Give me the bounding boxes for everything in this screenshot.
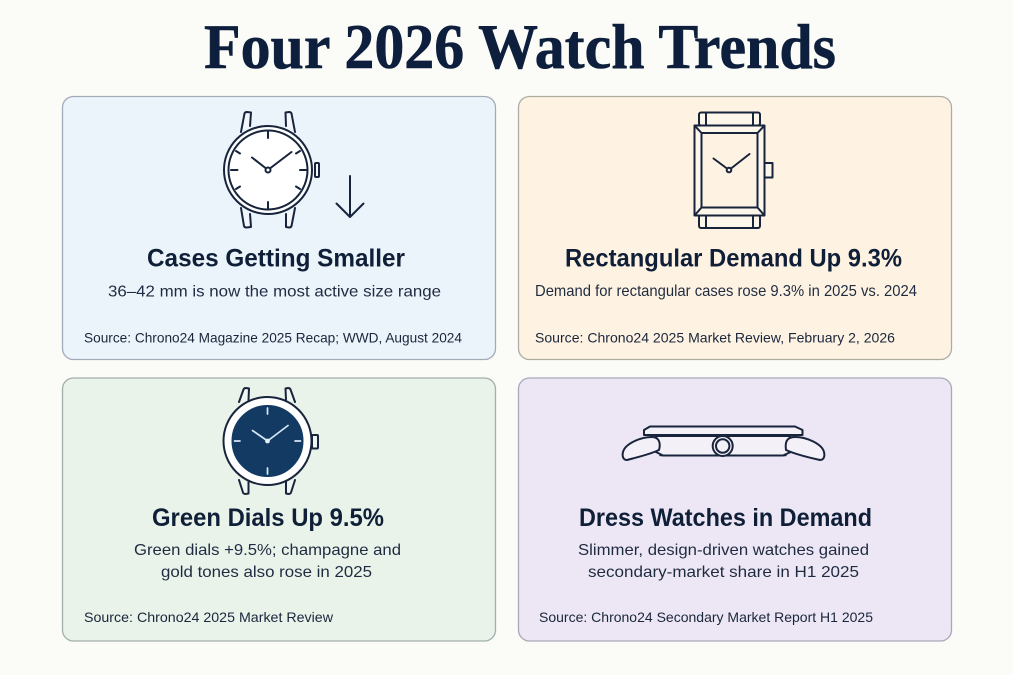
title: Four 2026 Watch Trends bbox=[204, 11, 836, 82]
icon: rectangular watch bbox=[694, 112, 772, 228]
icon: round watch bbox=[224, 112, 319, 228]
body text: Green dials +9.5%; champagne and bbox=[134, 542, 401, 559]
body text: Slimmer, design-driven watches gained bbox=[578, 542, 869, 559]
panel: cases getting smaller bbox=[62, 96, 496, 360]
heading: Green Dials Up 9.5% bbox=[152, 504, 384, 532]
icon: down arrow bbox=[336, 176, 364, 217]
heading: Dress Watches in Demand bbox=[579, 504, 872, 532]
body text: 36–42 mm is now the most active size range bbox=[108, 284, 441, 300]
panel: dress watches bbox=[518, 378, 952, 641]
body text: Demand for rectangular cases rose 9.3% in 2025 vs. 2024 bbox=[535, 283, 917, 300]
heading: Rectangular Demand Up 9.3% bbox=[565, 244, 902, 272]
panel: green dials: gold tones also rose in 2025 bbox=[161, 564, 372, 581]
panel: dress watches: secondary-market share in H1 2025 bbox=[588, 564, 859, 581]
source: Source: Chrono24 2025 Market Review, February 2, 2026 bbox=[535, 330, 895, 346]
icon: dark dial watch bbox=[224, 388, 318, 494]
source: Source: Chrono24 2025 Market Review bbox=[84, 609, 334, 625]
icon: side profile watch bbox=[623, 426, 824, 460]
source: Source: Chrono24 Secondary Market Report H1 2025 bbox=[539, 609, 873, 625]
heading: Cases Getting Smaller bbox=[147, 244, 405, 272]
panel: green dials bbox=[62, 378, 496, 641]
panel: rectangular demand bbox=[518, 96, 952, 360]
source: Source: Chrono24 Magazine 2025 Recap; WWD, August 2024 bbox=[84, 330, 462, 346]
